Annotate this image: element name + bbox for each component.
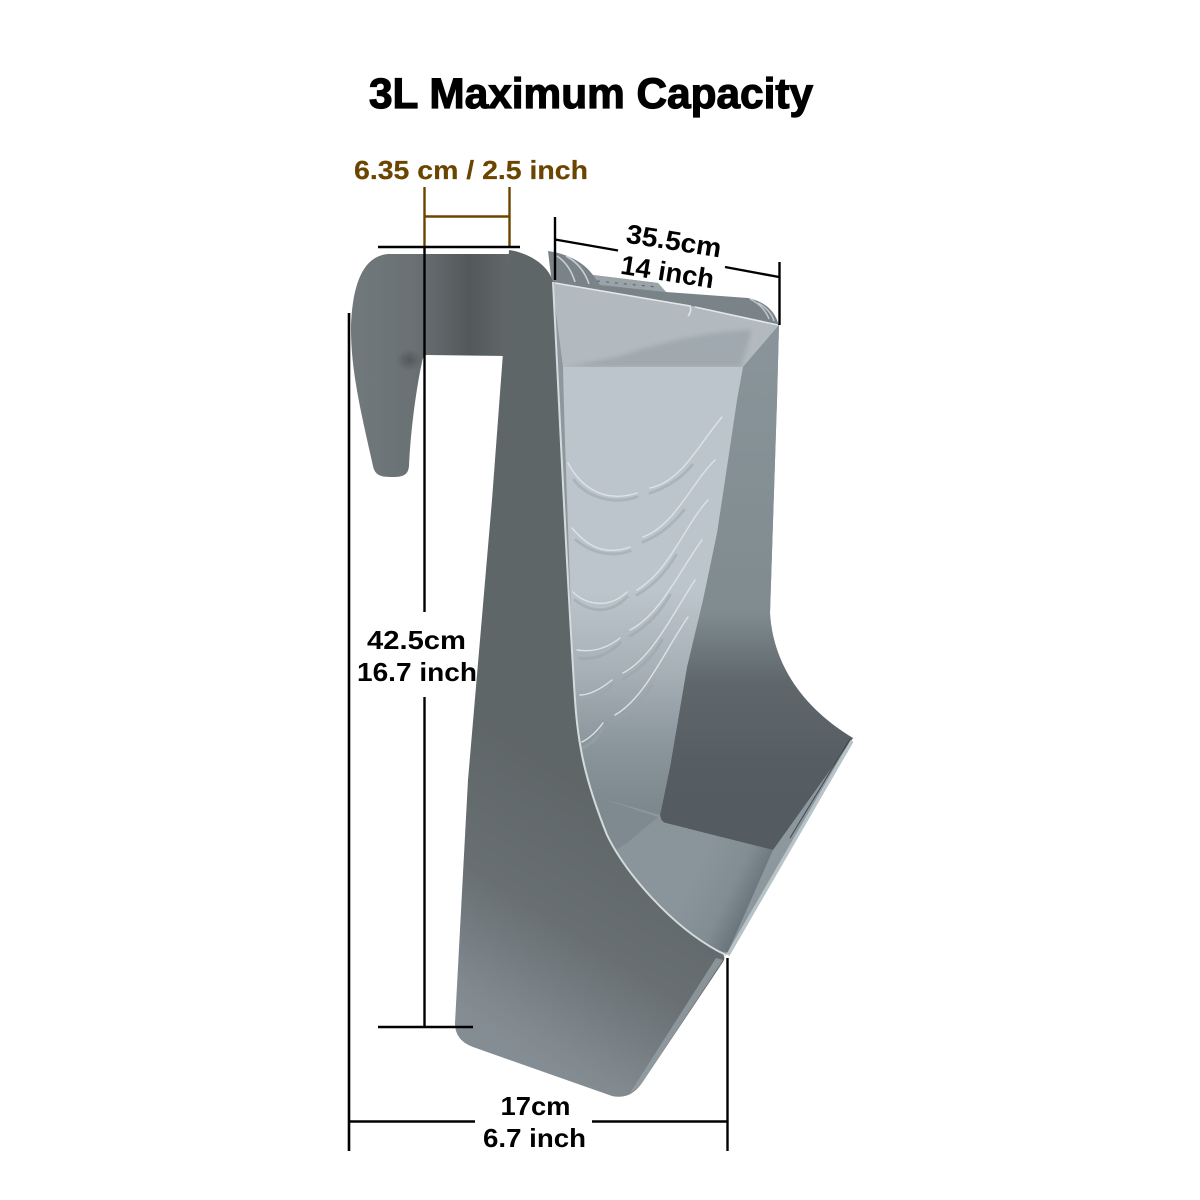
dimension: base width 17cm: 6.7 inch bbox=[483, 1123, 586, 1153]
title: 3L Maximum Capacity bbox=[369, 70, 813, 118]
hanging hook bbox=[351, 254, 509, 477]
inner edge highlight bbox=[553, 282, 726, 955]
outer edge highlight bbox=[630, 958, 723, 1093]
dimension: depth 35.5cm bbox=[555, 217, 780, 325]
tray floor bbox=[585, 800, 773, 952]
wave ribs bbox=[568, 417, 722, 742]
top slope shaded band bbox=[565, 330, 752, 367]
dimension: inner height 42.5cm: 16.7 inch bbox=[357, 657, 477, 687]
hook bend shadow bbox=[396, 349, 422, 371]
dimension: depth 35.5cm: 14 inch bbox=[619, 250, 716, 294]
wave rib shadows bbox=[574, 465, 692, 748]
tray outer back and interior base bbox=[552, 282, 853, 955]
interior back plane bbox=[563, 367, 743, 815]
floor left corner bbox=[580, 780, 658, 860]
dimension: total height line bbox=[348, 313, 350, 1151]
dimension: inner height 42.5cm bbox=[357, 247, 520, 1027]
dimension: hook width 6.35 cm bbox=[354, 155, 588, 247]
rear fins and ridge bbox=[548, 251, 779, 326]
top slope plane bbox=[552, 282, 779, 367]
dimension: base width 17cm: 17cm bbox=[500, 1091, 570, 1121]
rim inner dark line bbox=[790, 739, 850, 838]
top rim highlight and notch bbox=[555, 283, 778, 325]
icon: tray product illustration bbox=[351, 250, 853, 1097]
right rim highlight bbox=[728, 741, 852, 955]
right wall bbox=[660, 325, 853, 850]
dimension: base width 17cm bbox=[349, 958, 728, 1153]
dimension: hook width 6.35 cm: 6.35 cm / 2.5 inch bbox=[354, 155, 588, 185]
front side panel bbox=[455, 250, 724, 1097]
dimension: depth 35.5cm: 35.5cm bbox=[624, 219, 724, 263]
dimension: inner height 42.5cm: 42.5cm bbox=[367, 625, 466, 655]
